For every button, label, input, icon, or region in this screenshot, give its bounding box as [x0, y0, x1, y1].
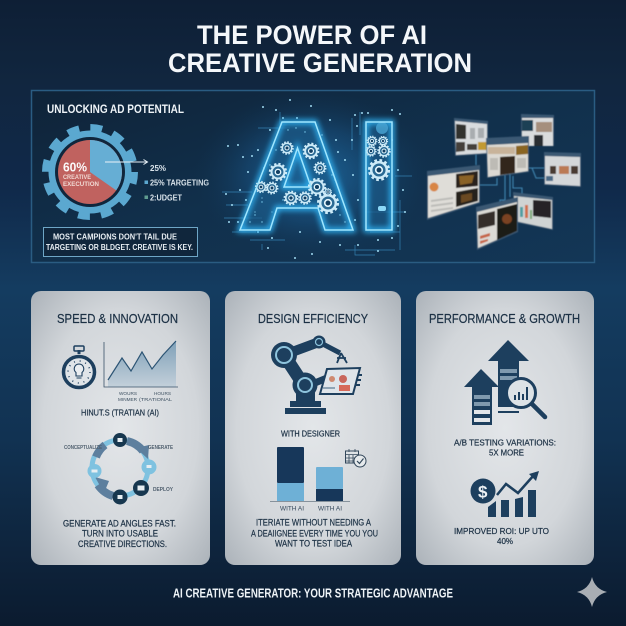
card text	[63, 518, 176, 550]
stat: improved ROI	[454, 526, 549, 546]
window 2	[486, 136, 529, 178]
window 7	[513, 192, 553, 230]
title: CREATIVE GENERATION	[168, 48, 472, 78]
icon: robot arm with tablet	[271, 336, 362, 414]
card text: A DEAIIGNEE EVERY TIME YOU YOU	[251, 528, 378, 540]
gear pie chart: CREATIVE	[63, 175, 91, 181]
letter I	[366, 122, 392, 230]
card: design efficiency	[225, 291, 401, 565]
gear pie chart	[46, 128, 134, 216]
stat: A/B testing: 5X MORE	[489, 448, 524, 458]
line chart	[104, 341, 178, 403]
bar chart: WITH AI	[318, 506, 342, 512]
icon: growth arrows with magnifier	[464, 340, 545, 425]
title: THE POWER OF AI	[197, 20, 427, 50]
window 4	[544, 152, 581, 187]
callout: MOST CAMPIONS DON'T TAIL DUE	[53, 232, 178, 242]
title	[168, 20, 472, 78]
chart caption: HINUT.S (TRATIAN (AI)	[81, 408, 159, 418]
icon: sparkle	[577, 577, 607, 607]
callout	[44, 228, 198, 256]
legend	[144, 164, 209, 202]
window 6	[476, 197, 518, 250]
stat: A/B testing	[454, 438, 556, 458]
icon: ROI growth chart	[470, 471, 539, 517]
cycle diagram: GENERATE	[148, 445, 173, 451]
card text: GENERATE AD ANGLES FAST.	[63, 518, 176, 530]
legend: 25% TARGETING	[150, 178, 209, 188]
window 5	[427, 165, 480, 220]
card text: CREATIVE DIRECTIONS.	[78, 539, 167, 550]
legend: 25%	[150, 164, 166, 173]
icon: ROI growth chart: $	[478, 482, 488, 502]
card heading: SPEED & INNOVATION	[57, 311, 178, 326]
card: speed and innovation	[31, 291, 210, 565]
line chart: WOURS	[119, 391, 137, 397]
window 3	[521, 114, 554, 146]
panel: unlocking ad potential	[32, 90, 594, 262]
stat: improved ROI: IMPROVED ROI: UP UTO	[454, 526, 549, 536]
window 1	[454, 118, 488, 156]
gear pie chart: EXECUTION	[63, 182, 99, 188]
bar chart: WITH AI	[280, 506, 304, 512]
cluster of ad creative windows	[427, 114, 581, 250]
line chart: MINMER	[118, 397, 138, 403]
cycle diagram: CONCEPTUALIZE	[64, 445, 102, 451]
panel heading: UNLOCKING AD POTENTIAL	[47, 104, 184, 116]
line chart: HOURS	[154, 391, 171, 397]
footer tagline: AI CREATIVE GENERATOR: YOUR STRATEGIC ADVANTAGE	[173, 586, 453, 600]
callout: TARGETING OR BLDGET. CREATIVE IS KEY.	[46, 243, 193, 252]
magnifier	[506, 378, 545, 417]
card text	[251, 518, 378, 550]
legend: 2:UDGET	[150, 194, 182, 202]
stat: A/B testing: A/B TESTING VARIATIONS:	[454, 438, 556, 448]
letter A	[240, 122, 353, 230]
gear pie chart: 60%	[63, 160, 87, 174]
card: performance and growth	[416, 291, 594, 565]
tablet	[320, 368, 362, 394]
card heading: PERFORMANCE & GROWTH	[429, 311, 580, 326]
icon: stopwatch	[64, 346, 94, 388]
arrow to legend	[105, 160, 148, 164]
card text: ITERIATE WITHOUT NEEDING A	[256, 518, 372, 528]
cycle diagram	[64, 433, 173, 504]
stat: improved ROI: 40%	[497, 536, 513, 546]
bar chart heading: WITH DESIGNER	[281, 428, 340, 438]
card text: WANT TO TEST IDEA	[275, 538, 353, 550]
glowing AI circuit graphic	[194, 90, 430, 260]
cycle diagram: DEPLOY	[153, 487, 173, 493]
icon: calendar check	[346, 449, 366, 467]
bar chart	[270, 447, 350, 512]
card heading: DESIGN EFFICIENCY	[258, 311, 368, 326]
line chart: (TRATIONAL	[139, 397, 172, 403]
card text: TURN INTO USABLE	[82, 528, 158, 540]
connector lines	[476, 136, 544, 208]
